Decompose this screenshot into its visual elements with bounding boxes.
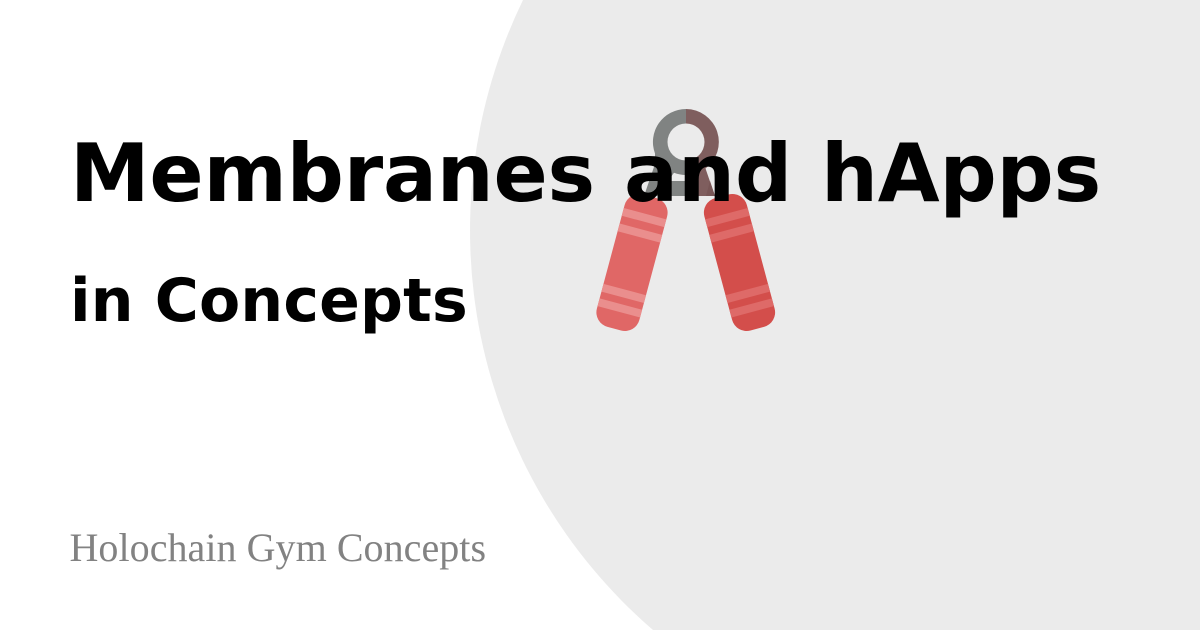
footer label: Holochain Gym Concepts — [70, 525, 486, 570]
background circle — [470, 0, 1200, 630]
title: Membranes — [70, 127, 595, 220]
title: and — [624, 127, 792, 220]
icon: hand grip — [593, 109, 778, 334]
spring frame left half — [644, 109, 686, 196]
title: hApps — [821, 127, 1101, 220]
subtitle: in Concepts — [70, 266, 468, 336]
frame shadow — [706, 181, 715, 196]
right handle — [701, 191, 778, 334]
left handle — [593, 191, 671, 334]
spring frame right half — [686, 109, 719, 196]
title — [70, 127, 1101, 220]
